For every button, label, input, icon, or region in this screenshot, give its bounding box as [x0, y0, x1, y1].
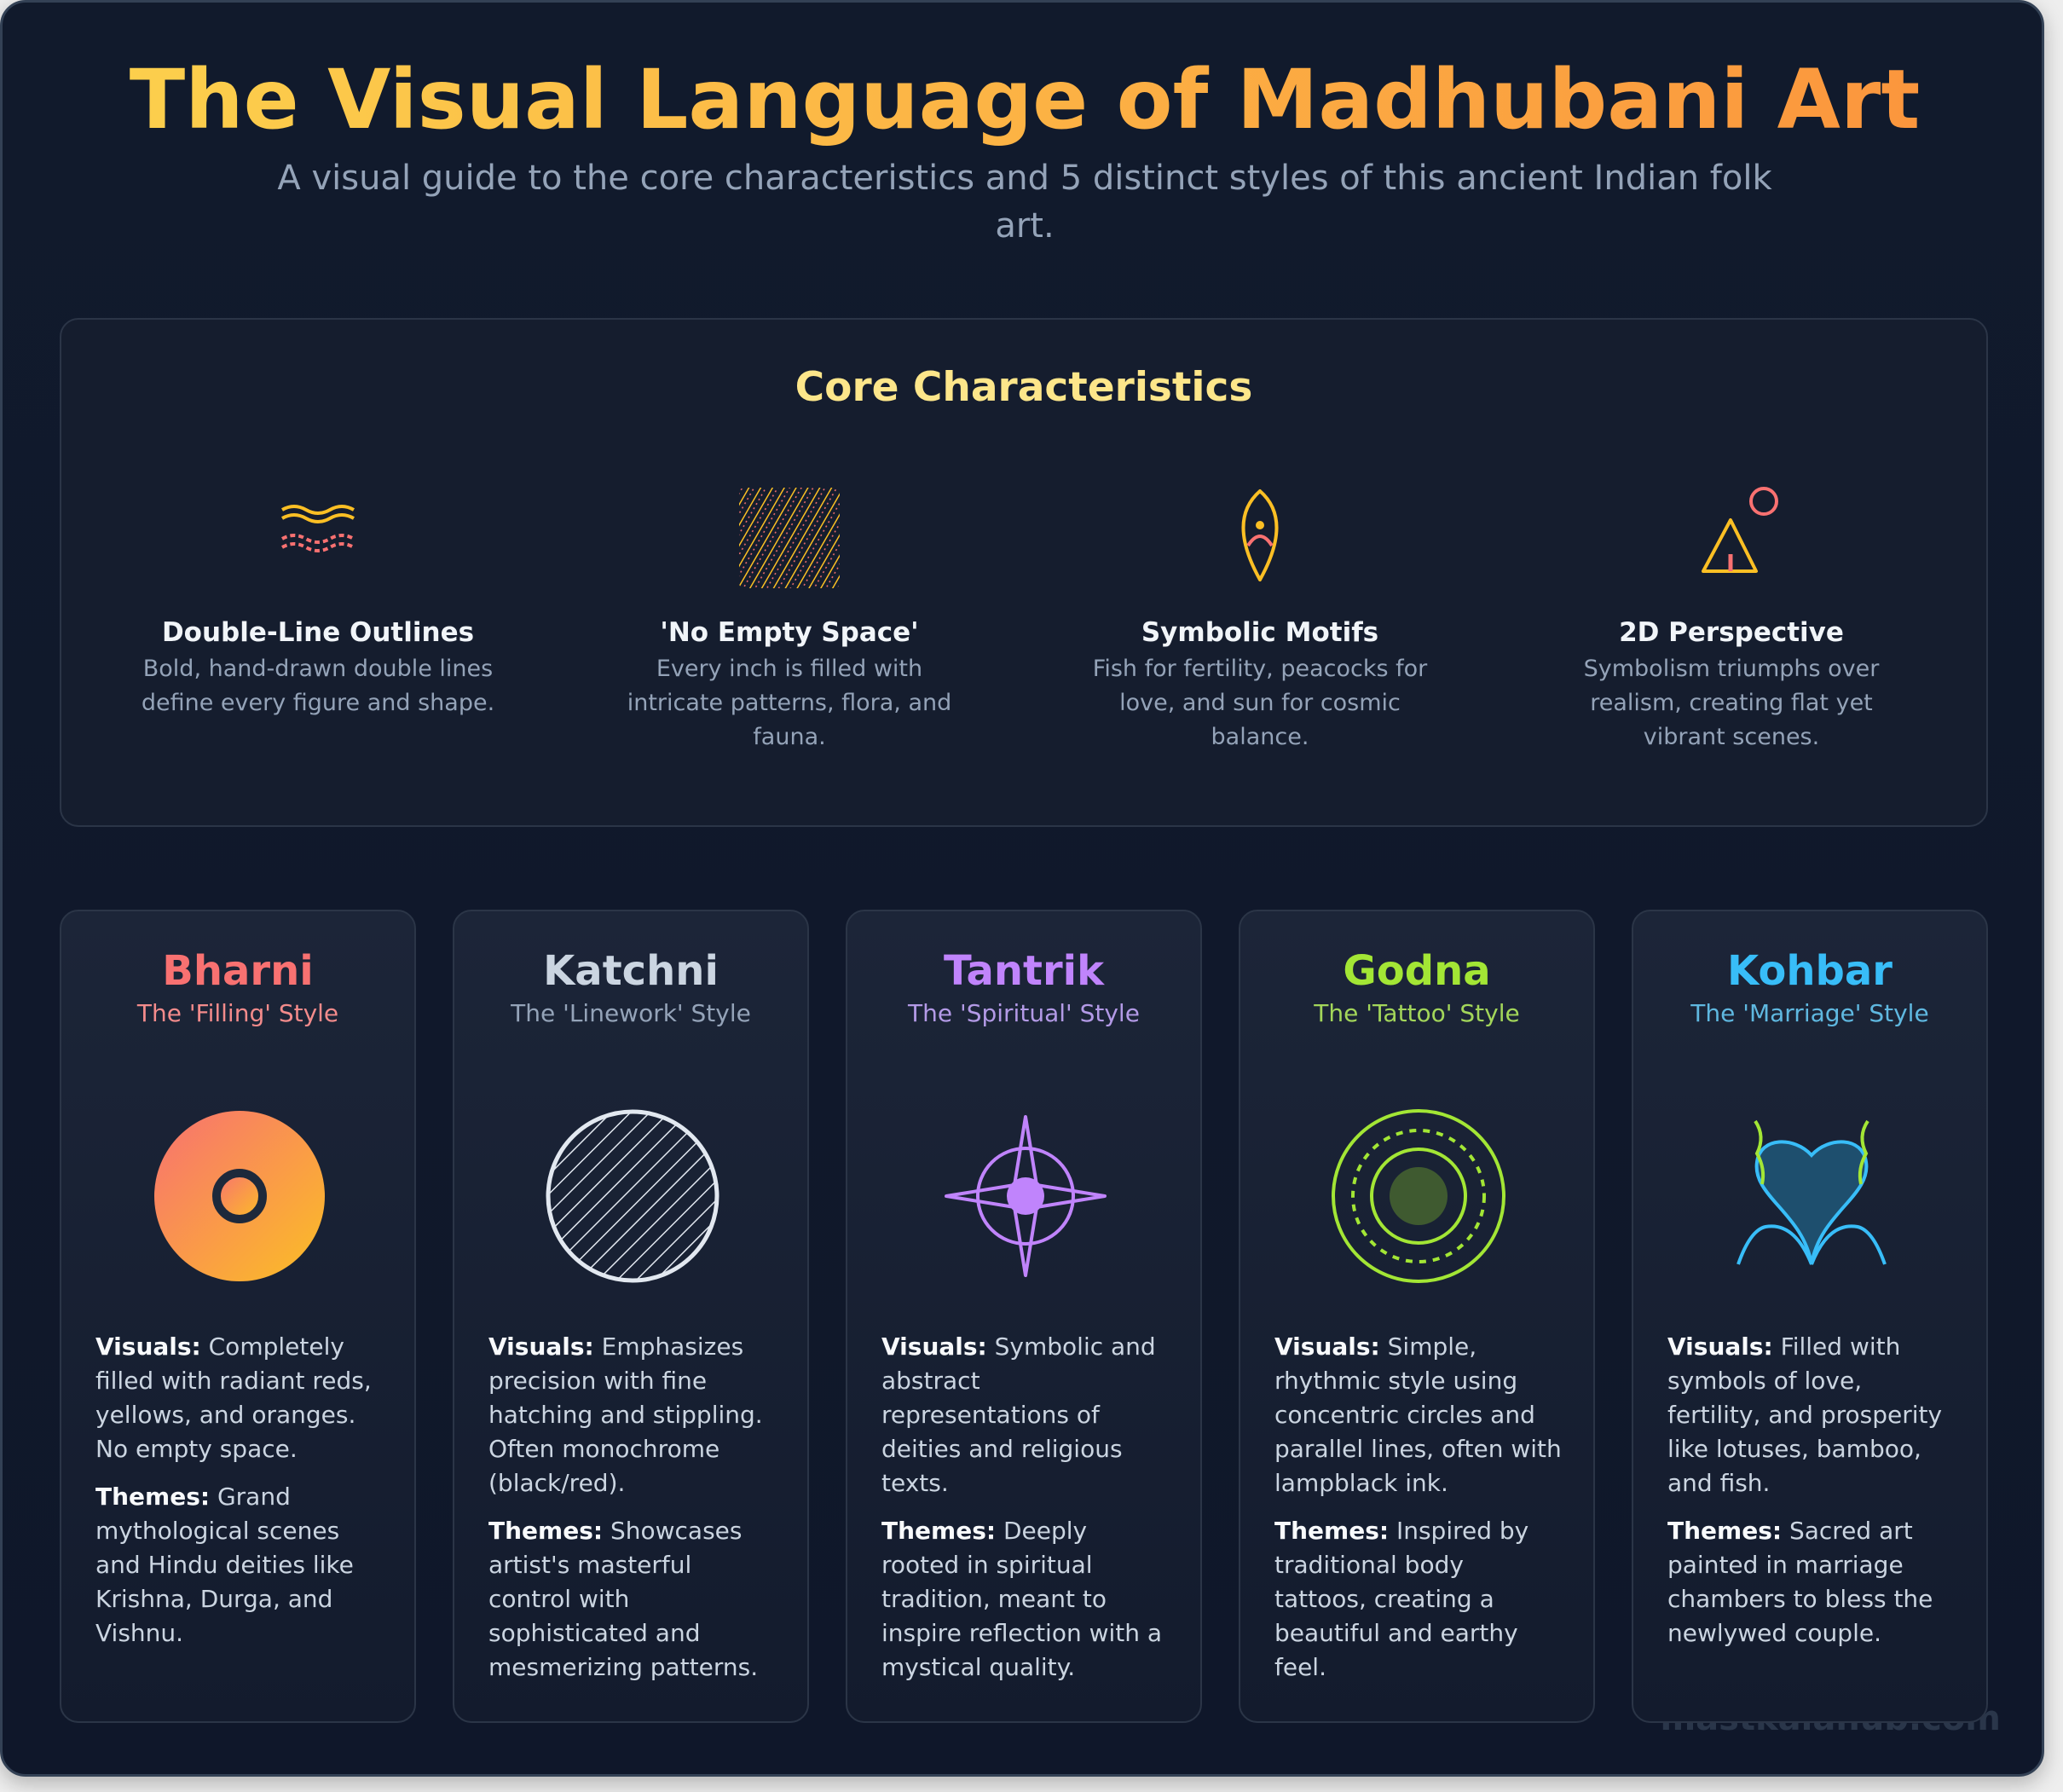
text block: Visuals: Emphasizes precision with fine hatching and stippling. Often monochrome (black/red). — [488, 1332, 763, 1497]
icon: star — [945, 1115, 1107, 1277]
panel: core characteristics: 'No Empty Space' — [660, 617, 919, 648]
text block: Visuals: Completely filled with radiant reds, yellows, and oranges. No empty space. — [95, 1332, 372, 1463]
panel: core characteristics — [60, 318, 1988, 827]
text block: Visuals: Filled with symbols of love, fertility, and prosperity like lotuses, bamboo, and fish. — [1667, 1332, 1942, 1497]
subheading: The 'Filling' Style — [137, 999, 338, 1027]
text block — [881, 1332, 1162, 1681]
subheading: The 'Tattoo' Style — [1314, 999, 1520, 1027]
panel: core characteristics: Symbolic Motifs — [1141, 617, 1378, 648]
watermark: mastkalahub.com — [1660, 1699, 2001, 1738]
text block: Visuals: Simple, rhythmic style using concentric circles and parallel lines, often with lampblack ink. — [1274, 1332, 1562, 1497]
heading: core characteristics: Core Characteristics — [795, 364, 1252, 411]
subheading: The 'Linework' Style — [511, 999, 751, 1027]
icon: lotus heart — [1737, 1120, 1887, 1265]
panel: core characteristics: Every inch is filled with intricate patterns, flora, and fauna. — [627, 656, 951, 750]
heading: Katchni: Katchni — [543, 947, 719, 995]
card: Kohbar — [1632, 910, 1988, 1723]
item: symbolic motifs — [1093, 489, 1427, 750]
panel: core characteristics: Bold, hand-drawn double lines define every figure and shape. — [142, 656, 494, 716]
item: double-line outlines — [142, 505, 494, 716]
text block — [488, 1332, 763, 1681]
text block: Themes: Showcases artist's masterful control with sophisticated and mesmerizing patterns. — [488, 1517, 758, 1681]
card: Tantrik — [846, 910, 1202, 1723]
panel: core characteristics: Fish for fertility, peacocks for love, and sun for cosmic balance. — [1093, 656, 1427, 750]
card: Katchni — [453, 910, 809, 1723]
text block: Themes: Deeply rooted in spiritual tradition, meant to inspire reflection with a mystical quality. — [881, 1517, 1162, 1681]
heading: Tantrik: Tantrik — [944, 947, 1104, 995]
title: The Visual Language of Madhubani Art — [130, 52, 1920, 147]
panel: core characteristics: Double-Line Outlines — [162, 617, 474, 648]
text block: Themes: Sacred art painted in marriage chambers to bless the newlywed couple. — [1667, 1517, 1933, 1647]
card: Bharni — [60, 910, 416, 1723]
card: Godna — [1239, 910, 1595, 1723]
icon: triangle and sun — [1702, 487, 1778, 573]
text block: Themes: Grand mythological scenes and Hindu deities like Krishna, Durga, and Vishnu. — [95, 1483, 354, 1647]
text block: Visuals: Symbolic and abstract representations of deities and religious texts. — [881, 1332, 1156, 1497]
icon: hatch square — [739, 488, 840, 588]
icon: hatched circle — [546, 1110, 719, 1282]
subheading: The 'Spiritual' Style — [908, 999, 1140, 1027]
icon: fish eye — [1241, 489, 1279, 581]
text block — [1274, 1332, 1562, 1681]
icon: concentric circles — [1332, 1109, 1505, 1283]
icon: double lines — [281, 505, 355, 552]
text block: Themes: Inspired by traditional body tattoos, creating a beautiful and earthy feel. — [1274, 1517, 1528, 1681]
panel: core characteristics: Symbolism triumphs over realism, creating flat yet vibrant scenes. — [1584, 656, 1879, 750]
subheading: The 'Marriage' Style — [1690, 999, 1929, 1027]
item: no empty space — [627, 488, 951, 750]
subtitle: A visual guide to the core characteristics and 5 distinct styles of this ancient Indian folk art. — [277, 159, 1772, 246]
heading: Kohbar: Kohbar — [1727, 947, 1893, 995]
item: 2D perspective — [1584, 487, 1879, 750]
text block — [1667, 1332, 1942, 1647]
text block — [95, 1332, 372, 1647]
panel: core characteristics: 2D Perspective — [1619, 617, 1844, 648]
heading: Bharni: Bharni — [162, 947, 314, 995]
icon: filled circle — [154, 1111, 325, 1281]
heading: Godna: Godna — [1343, 947, 1491, 995]
